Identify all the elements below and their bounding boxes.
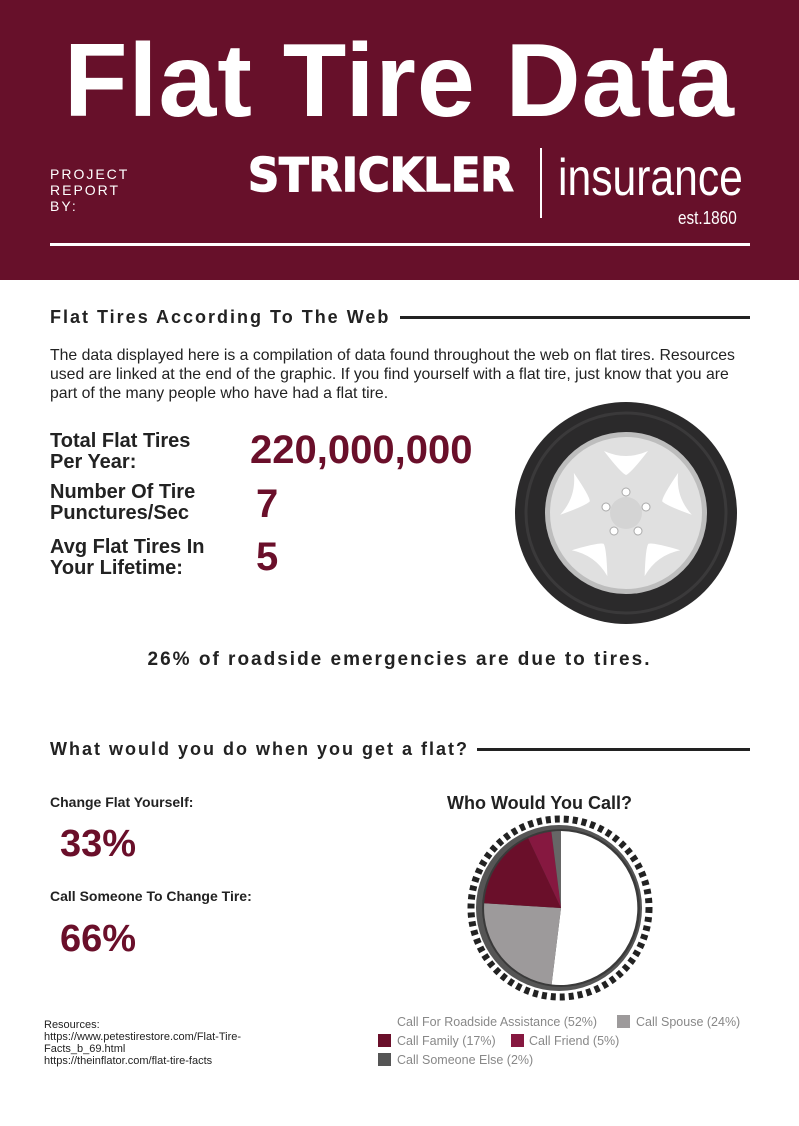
resources: https://theinflator.com/flat-tire-facts [44,1055,212,1067]
resources: https://www.petestirestore.com/Flat-Tire- [44,1031,241,1043]
text: 5 [256,535,278,579]
intro text: The data displayed here is a compilation of data found throughout the web on flat tires. Resources used are linked at the end of the graphic. If you find yourself with a flat tire, just know that you are part of the many people who have had a flat tire. [50,347,735,402]
logo: strickler insurance: STRICKLER [248,148,514,202]
legend: Call Family (17%) [397,1034,496,1048]
heading: flat tires according to the web: Flat Tires According To The Web [50,307,390,327]
header band [0,0,799,280]
resources: Facts_b_69.html [44,1043,125,1055]
project report by: REPORT [50,182,120,198]
stat labels: Per Year: [50,451,136,473]
heading: flat tires according to the web [50,307,750,327]
resources: Resources: [44,1019,100,1031]
text: 66% [60,918,136,960]
text: Your Lifetime: [50,557,183,579]
change flat yourself: Change Flat Yourself: [50,794,193,810]
heading: what would you do: What would you do when you get a flat? [50,739,469,759]
legend [378,1015,740,1067]
legend: Call Friend (5%) [529,1034,619,1048]
logo: strickler insurance [248,148,743,228]
stat labels [50,430,190,473]
text: Punctures/Sec [50,502,189,524]
stat labels: Total Flat Tires [50,430,190,452]
legend: Call Spouse (24%) [636,1015,740,1029]
legend: Call For Roadside Assistance (52%) [397,1015,597,1029]
stat numbers: 220,000,000 [250,428,472,472]
title: Flat Tire Data [64,23,735,139]
heading: what would you do [50,739,750,759]
resources [44,1019,241,1067]
text: Number Of Tire [50,481,195,503]
text: 33% [60,823,136,865]
logo: strickler insurance: est.1860 [678,208,737,228]
project report by: PROJECT [50,166,129,182]
project report by [50,166,129,214]
chart title: Who Would You Call? [447,793,632,813]
pie chart [468,816,652,1000]
text: 7 [256,482,278,526]
icon: tire [515,402,737,624]
text: Avg Flat Tires In [50,536,204,558]
statement: 26% of roadside emergencies are due to tires. [148,649,651,670]
call someone: Call Someone To Change Tire: [50,888,252,904]
legend: Call Someone Else (2%) [397,1053,533,1067]
logo: strickler insurance: insurance [558,149,743,207]
project report by: BY: [50,198,78,214]
